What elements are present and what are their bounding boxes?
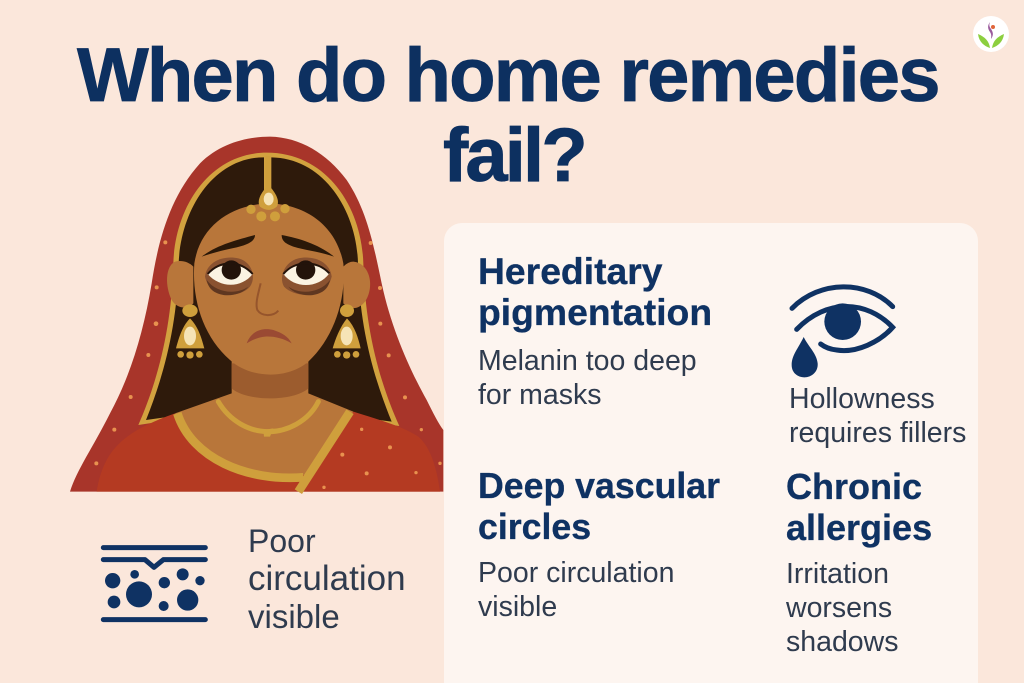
- text: poor circulation: [478, 557, 674, 623]
- face: [194, 203, 344, 375]
- text: melanin: Melanin too deep: [478, 345, 697, 377]
- text: melanin: [478, 345, 697, 411]
- neck: [175, 357, 353, 485]
- text: poor circulation: visible: [478, 591, 557, 623]
- text: hollowness: requires fillers: [789, 417, 966, 449]
- dress: [97, 413, 305, 492]
- text: poor circulation left: Poor: [248, 523, 316, 559]
- eyebrows: [202, 235, 255, 257]
- ears: [167, 261, 193, 307]
- illustration: sad woman in red veil: [70, 136, 444, 494]
- heading: hereditary pigmentation: Hereditary: [478, 250, 662, 292]
- earrings: [176, 304, 361, 359]
- text: poor circulation left: [248, 523, 406, 635]
- heading: deep vascular circles: circles: [478, 507, 591, 547]
- heading: chronic allergies: allergies: [786, 507, 932, 548]
- text: irritation: worsens: [786, 592, 892, 624]
- title: [76, 33, 939, 198]
- heading: chronic allergies: [786, 466, 932, 548]
- necklace: [218, 402, 318, 432]
- text: poor circulation left: visible: [248, 598, 340, 635]
- text: irritation: shadows: [786, 626, 898, 658]
- dress neckline trim: [177, 413, 303, 478]
- icon: skin layers: [100, 545, 208, 622]
- veil: [70, 137, 443, 492]
- text: poor circulation left: circulation: [248, 559, 406, 598]
- text: hollowness: [789, 383, 966, 449]
- veil dots: [94, 240, 442, 489]
- text: poor circulation: Poor circulation: [478, 557, 674, 589]
- text: irritation: [786, 558, 898, 658]
- dark circles: [205, 257, 253, 295]
- heading: hereditary pigmentation: [478, 250, 712, 333]
- heading: deep vascular circles: Deep vascular: [478, 466, 720, 506]
- veil gold trim and hair: [138, 153, 399, 426]
- eyes: [208, 265, 253, 285]
- mouth: [247, 329, 292, 343]
- logo: [973, 16, 1009, 52]
- heading: hereditary pigmentation: pigmentation: [478, 291, 712, 333]
- text: melanin: for masks: [478, 379, 602, 411]
- title: When do home remedies: [77, 33, 939, 118]
- heading: chronic allergies: Chronic: [786, 466, 922, 507]
- nose: [257, 283, 278, 315]
- panel: causes: [444, 223, 978, 683]
- heading: deep vascular circles: [478, 466, 720, 547]
- maang tikka: [246, 156, 290, 221]
- text: hollowness: Hollowness: [789, 383, 935, 415]
- title: fail?: [443, 113, 585, 198]
- text: irritation: Irritation: [786, 558, 889, 590]
- icon: eye with tear: [790, 284, 896, 378]
